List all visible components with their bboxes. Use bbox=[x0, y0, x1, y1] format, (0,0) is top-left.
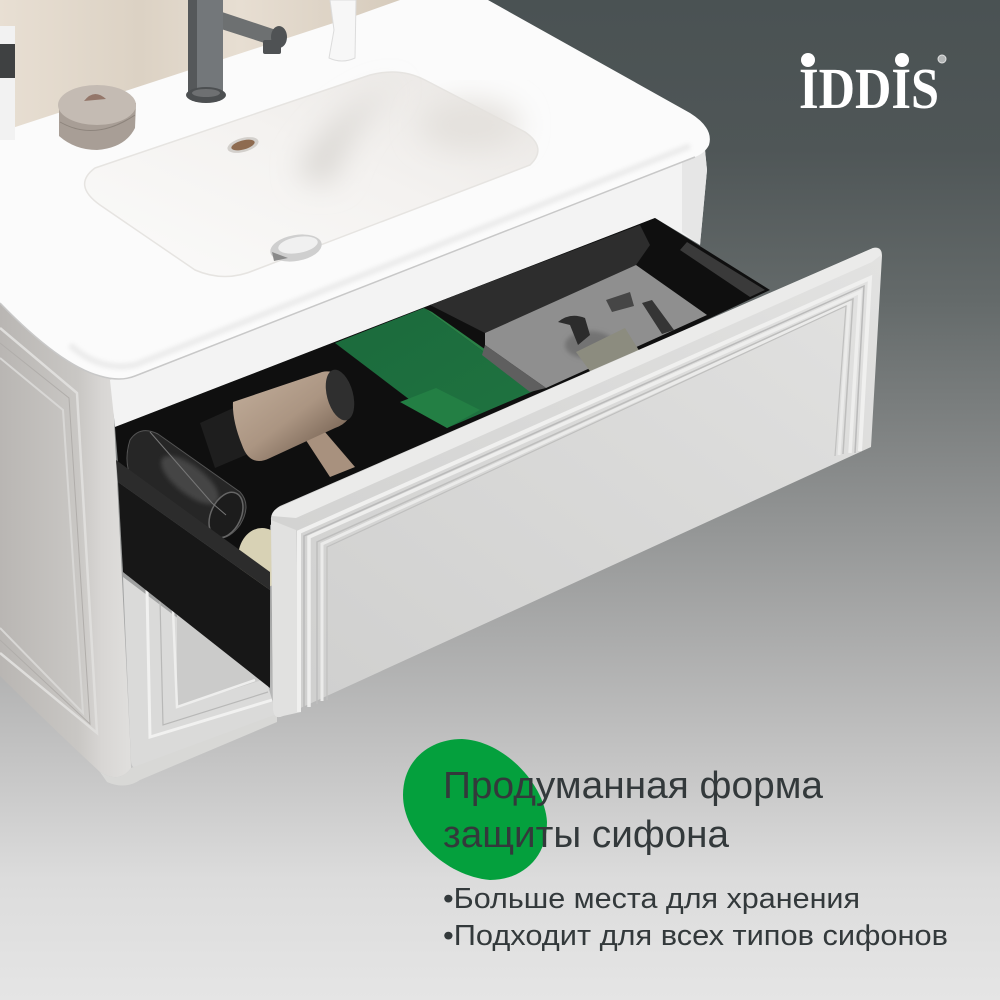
heading: защиты сифона bbox=[443, 814, 730, 856]
logo: IDDIS bbox=[799, 56, 939, 121]
overflow bbox=[226, 134, 260, 156]
bullet list bbox=[443, 883, 948, 952]
grey faucet bbox=[186, 0, 287, 103]
toiletries on towel bbox=[558, 292, 674, 374]
hair dryer bbox=[200, 367, 359, 477]
drain plug bbox=[268, 231, 324, 265]
washbasin bbox=[85, 72, 538, 276]
black cylinder bbox=[127, 431, 250, 543]
green divider bbox=[335, 308, 540, 428]
cabinet side panel bbox=[0, 300, 131, 777]
drawer interior bbox=[115, 218, 770, 580]
worktop bbox=[0, 0, 710, 379]
white apron under worktop bbox=[110, 150, 707, 427]
heading bbox=[443, 765, 824, 856]
bullet list: •Подходит для всех типов сифонов bbox=[443, 920, 948, 952]
sponge bbox=[238, 528, 286, 588]
heading: Продуманная форма bbox=[443, 765, 824, 807]
green blob bbox=[403, 739, 547, 880]
beige wall bbox=[0, 0, 400, 160]
bullet list: •Больше места для хранения bbox=[443, 883, 860, 915]
taupe jar bbox=[58, 85, 136, 150]
towel bbox=[482, 265, 707, 392]
lower drawer bbox=[100, 577, 277, 786]
white faucet bbox=[329, 0, 356, 61]
drawer side wall bbox=[116, 460, 270, 688]
bottle at left edge bbox=[0, 26, 15, 140]
drawer front bbox=[271, 248, 882, 717]
